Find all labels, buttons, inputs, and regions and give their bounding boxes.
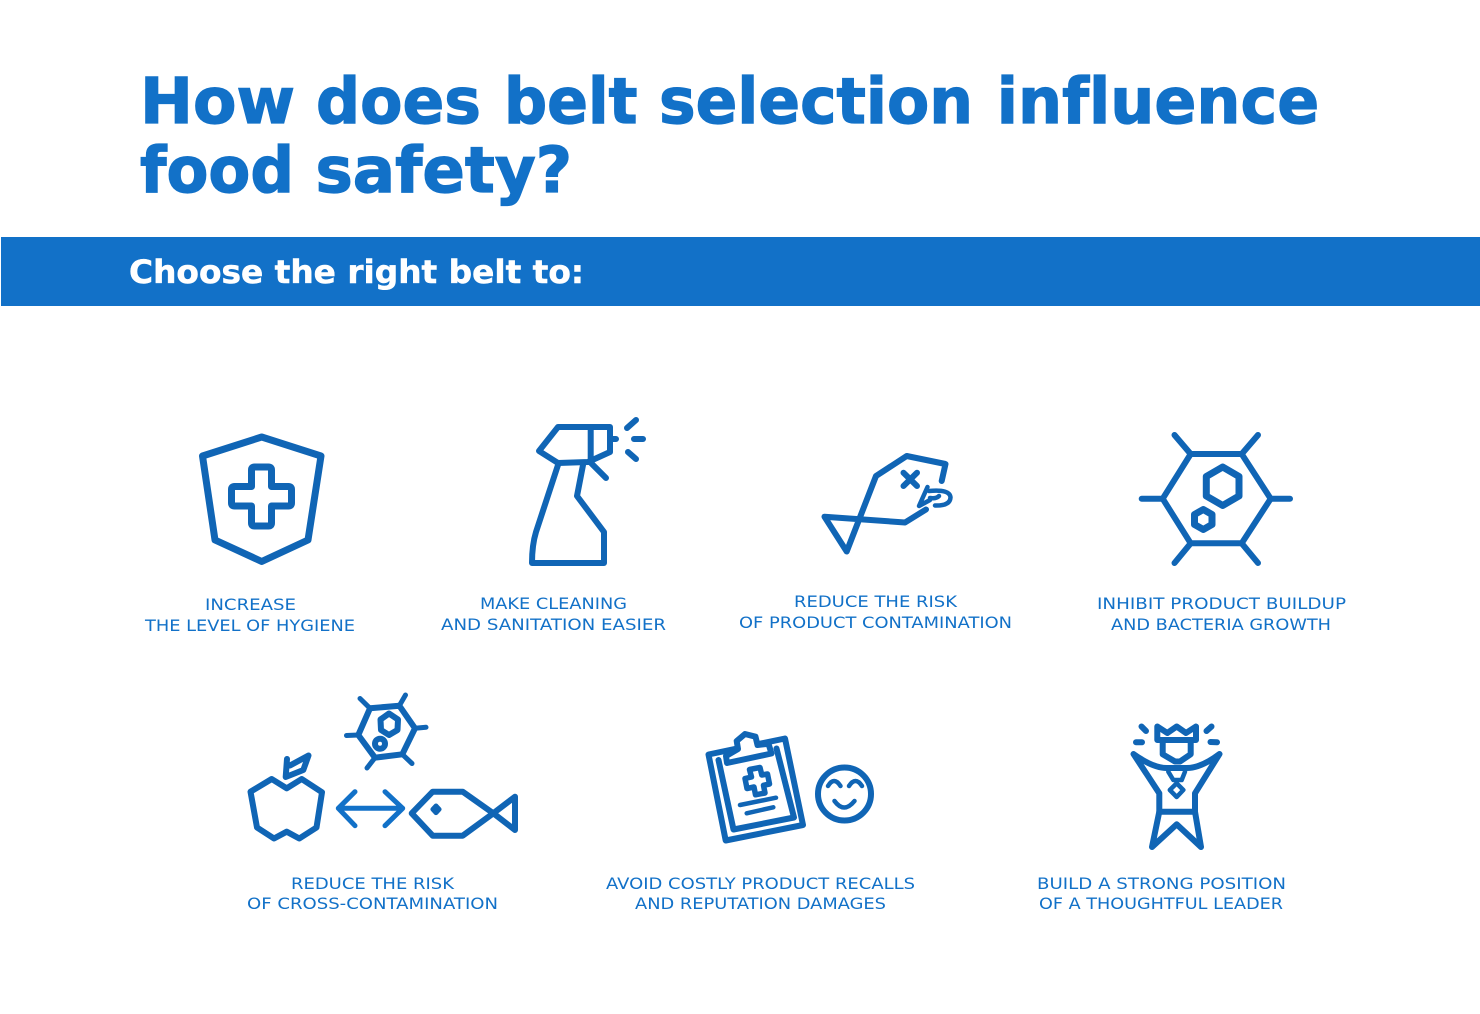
label: thought leader [1037, 874, 1286, 913]
label: increase hygiene [144, 595, 355, 635]
icon: tilted bacteria [346, 695, 426, 768]
title: selection [659, 65, 973, 138]
banner [1, 237, 1480, 306]
title [140, 65, 1319, 207]
title: does [316, 65, 481, 138]
label: cross-contamination: REDUCE THE RISK [291, 874, 455, 893]
label: increase hygiene: THE LEVEL OF HYGIENE [144, 616, 355, 635]
label: contamination: REDUCE THE RISK [794, 592, 958, 611]
icon: shield with cross [202, 437, 321, 562]
banner heading: Choose the right belt to: [129, 253, 584, 291]
title: belt [504, 65, 638, 138]
title: influence [997, 65, 1319, 138]
label: cross-contamination [247, 874, 498, 913]
label: buildup: INHIBIT PRODUCT BUILDUP [1097, 594, 1346, 613]
label: cleaning: MAKE CLEANING [480, 594, 627, 613]
label: thought leader: OF A THOUGHTFUL LEADER [1039, 894, 1283, 913]
icon: crowned leader [1134, 726, 1220, 847]
icon: smiley [818, 768, 871, 820]
icon: double arrow [338, 792, 403, 826]
label: buildup [1097, 594, 1346, 634]
label: cleaning: AND SANITATION EASIER [441, 615, 666, 634]
icon: apple [250, 756, 322, 838]
label: recalls [606, 874, 915, 913]
label: cross-contamination: OF CROSS-CONTAMINATION [247, 894, 498, 913]
label: recalls: AVOID COSTLY PRODUCT RECALLS [606, 874, 915, 893]
icon: spray bottle [532, 420, 643, 563]
label: buildup: AND BACTERIA GROWTH [1111, 615, 1331, 634]
label: recalls: AND REPUTATION DAMAGES [635, 894, 886, 913]
title: food [140, 134, 294, 207]
icon: clipboard [708, 734, 803, 840]
icon: bacteria hexagon [1142, 435, 1290, 563]
title: safety? [316, 134, 572, 207]
label: cleaning [441, 594, 666, 634]
title: How [140, 65, 295, 138]
label: increase hygiene: INCREASE [205, 595, 296, 614]
label: contamination [739, 592, 1012, 632]
icon: fish [412, 792, 515, 836]
icon: fish with hook [824, 456, 950, 552]
label: thought leader: BUILD A STRONG POSITION [1037, 874, 1286, 893]
icon: cross-contamination group [250, 695, 515, 838]
label: contamination: OF PRODUCT CONTAMINATION [739, 613, 1012, 632]
